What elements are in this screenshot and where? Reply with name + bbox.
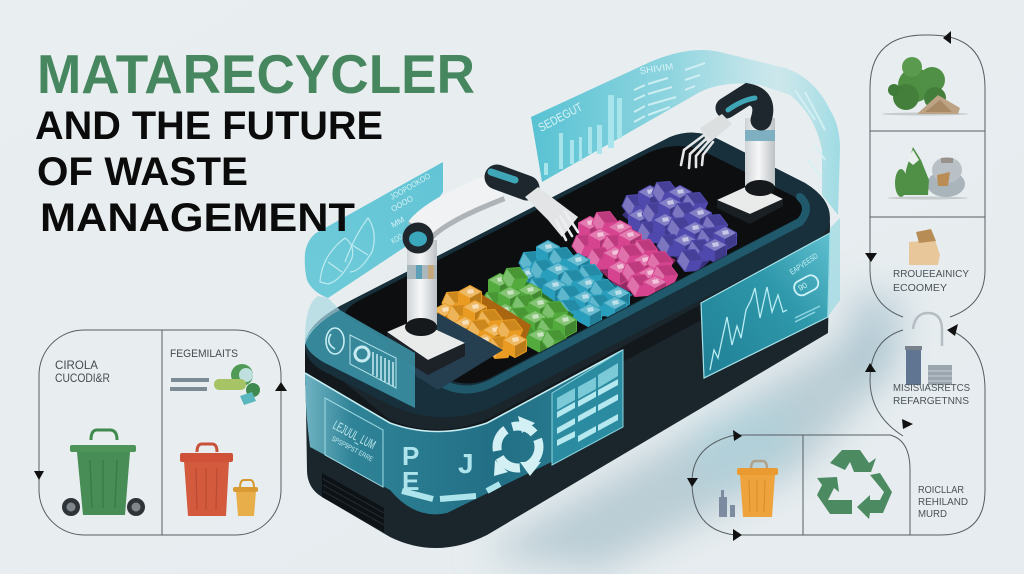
robot base: [387, 320, 465, 360]
icon: recycling symbol: [817, 450, 892, 519]
robot elbow joint: [402, 222, 434, 254]
icon: speed lines and bottle: [170, 364, 260, 405]
tub interior: [345, 146, 802, 384]
display text: JOOPOOKOO: [388, 171, 432, 202]
band data table: [552, 350, 623, 465]
title line: Matarecycler: MATARECYCLER: [37, 43, 475, 105]
band large glyphs: E: [402, 466, 419, 496]
machine body: [305, 133, 830, 548]
arrow: left down: [687, 478, 698, 487]
display text lines: [634, 63, 825, 178]
label: left: CIROLA: [55, 360, 98, 372]
orange cubes: [434, 286, 531, 362]
band large glyphs: P: [402, 441, 419, 471]
label: circular: REHILAND: [918, 497, 968, 508]
right end glass edge: [827, 218, 840, 318]
icon: red bin: [180, 444, 233, 516]
green cubes: [480, 263, 576, 355]
panel: bottom-left bins frame: [34, 330, 287, 535]
band label box: SPSP9PST ERRE: [330, 436, 374, 463]
panel: holographic left display: [305, 162, 443, 298]
display text: KOO: [390, 232, 404, 246]
band large glyphs: [402, 441, 474, 496]
robot gripper: [681, 114, 732, 168]
icon: small yellow bin: [233, 480, 258, 516]
icon: leafy bush and mulch: [882, 57, 968, 116]
display heading: SEDEGUT: [536, 99, 585, 135]
icon: cardboard box: [909, 229, 940, 265]
icon: jar: [905, 346, 922, 385]
band large glyphs: J: [458, 448, 474, 479]
hook link: [913, 313, 942, 346]
label: left: [55, 360, 110, 385]
glass front-left panel: [305, 296, 415, 408]
teal lip around tub: [420, 197, 806, 390]
waste cube piles: [434, 177, 738, 362]
machine shadow: [480, 290, 905, 570]
label: circular economy: [893, 268, 969, 294]
label: left: CUCODI&R: [55, 373, 110, 385]
title line: of waste: OF WASTE: [37, 150, 248, 194]
bar chart: [544, 95, 622, 175]
arrow: right bottom: [733, 529, 742, 541]
icon: recycling ring: [494, 416, 541, 476]
panel: holographic back display: [531, 50, 840, 215]
label: right: FEGEMILAITS: [170, 348, 238, 360]
left compartment floor: [388, 313, 503, 390]
band label box: [325, 398, 383, 487]
machine: [305, 94, 840, 548]
icon: outline sketch: [320, 218, 374, 284]
robot column: [745, 118, 775, 186]
panel: right vertical capsule: [865, 31, 985, 317]
display small heading: SHIVIM: [639, 61, 674, 76]
label: circular: MURD: [918, 509, 947, 520]
frame outline: [39, 330, 281, 535]
divider: [161, 330, 163, 535]
display text: MM: [390, 215, 406, 230]
robot column: [407, 240, 437, 325]
band label box: LEJUUL_LUM: [331, 417, 378, 452]
arrow: right top: [733, 430, 742, 441]
icon: orange bin: [737, 461, 778, 517]
capsule outline: [870, 35, 985, 317]
right robot arm: [681, 94, 783, 224]
title: [35, 43, 475, 240]
arrow: pointing right: [902, 419, 913, 429]
label: circular economy: ECOOMEY: [893, 282, 947, 294]
panel: glass status band: [305, 350, 623, 514]
left robot arm: [387, 172, 578, 390]
band dashes: [402, 484, 500, 499]
teal cubes: [516, 241, 633, 327]
icon: capsule badge: [792, 273, 821, 298]
arrow: up: [865, 363, 876, 372]
arrow: top: [943, 31, 951, 44]
pink cubes: [570, 207, 680, 300]
title line: and the future: AND THE FUTURE: [35, 104, 383, 148]
row dividers: [870, 131, 985, 217]
label: circular: [918, 485, 968, 520]
icon: leaf and jar: [888, 147, 968, 200]
label: materials: MISIS\IASRETCS: [893, 382, 970, 394]
icon: green wheelie bin: [62, 430, 145, 516]
label: circular economy: RROUEEAINICY: [893, 268, 969, 280]
display text: OOOO: [390, 194, 415, 214]
title line: management: MANAGEMENT: [40, 196, 355, 240]
label: materials: [893, 382, 970, 407]
capsule outline: [692, 330, 985, 535]
icon: barcode label: [350, 335, 396, 388]
arrow: pointing left: [947, 324, 958, 336]
display text: [388, 171, 432, 246]
machine top rim: [305, 133, 830, 417]
arrow: down: [865, 253, 877, 262]
caption lines: [795, 306, 820, 322]
device caption: EAPVEESD: [788, 251, 820, 277]
black strip under rim: [305, 235, 830, 441]
panel: lower right capsule: [687, 313, 985, 541]
robot base: [717, 184, 783, 214]
icon: circular gauge: [326, 328, 344, 354]
arrow: up: [275, 382, 287, 391]
robot upper arm: [419, 184, 500, 232]
icon: stack: [928, 365, 952, 385]
line chart: [710, 287, 787, 370]
robot gripper: [525, 187, 578, 240]
vent grille: [322, 473, 384, 532]
icon: bottles: [719, 490, 735, 517]
icon: capsule badge: 90: [797, 280, 809, 293]
arrow: down: [34, 471, 44, 480]
label: materials: REFARGETNNS: [893, 395, 969, 407]
robot forearm: [497, 177, 527, 188]
robot forearm: [726, 94, 763, 120]
divider: [802, 435, 804, 535]
label: circular: ROICLLAR: [918, 485, 964, 496]
panel: waveform screen: [701, 233, 830, 378]
purple cubes: [620, 177, 738, 275]
